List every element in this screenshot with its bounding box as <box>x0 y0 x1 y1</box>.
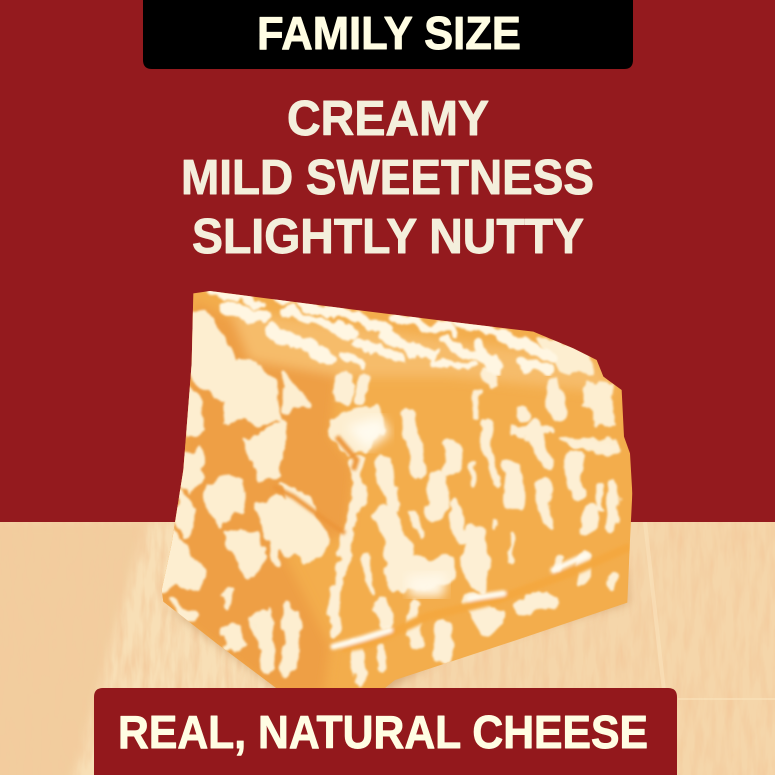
descriptor: slightly nutty: SLIGHTLY NUTTY <box>192 210 584 264</box>
front face drips <box>332 373 614 680</box>
left face marbling <box>185 313 278 425</box>
descriptor: creamy: CREAMY <box>287 92 489 146</box>
flavor descriptors <box>181 92 594 264</box>
top face white streaks <box>205 286 552 372</box>
cheese wedge <box>162 291 632 688</box>
wooden board <box>0 522 775 775</box>
bottom banner text: REAL, NATURAL CHEESE <box>118 706 648 758</box>
background: red <box>0 0 775 522</box>
ledges <box>273 437 630 648</box>
banner text: FAMILY SIZE <box>257 7 521 59</box>
bottom banner: real natural cheese <box>94 688 677 775</box>
cheese shadow <box>166 570 628 692</box>
descriptor: mild sweetness: MILD SWEETNESS <box>181 151 594 205</box>
top banner: family size <box>143 0 633 69</box>
